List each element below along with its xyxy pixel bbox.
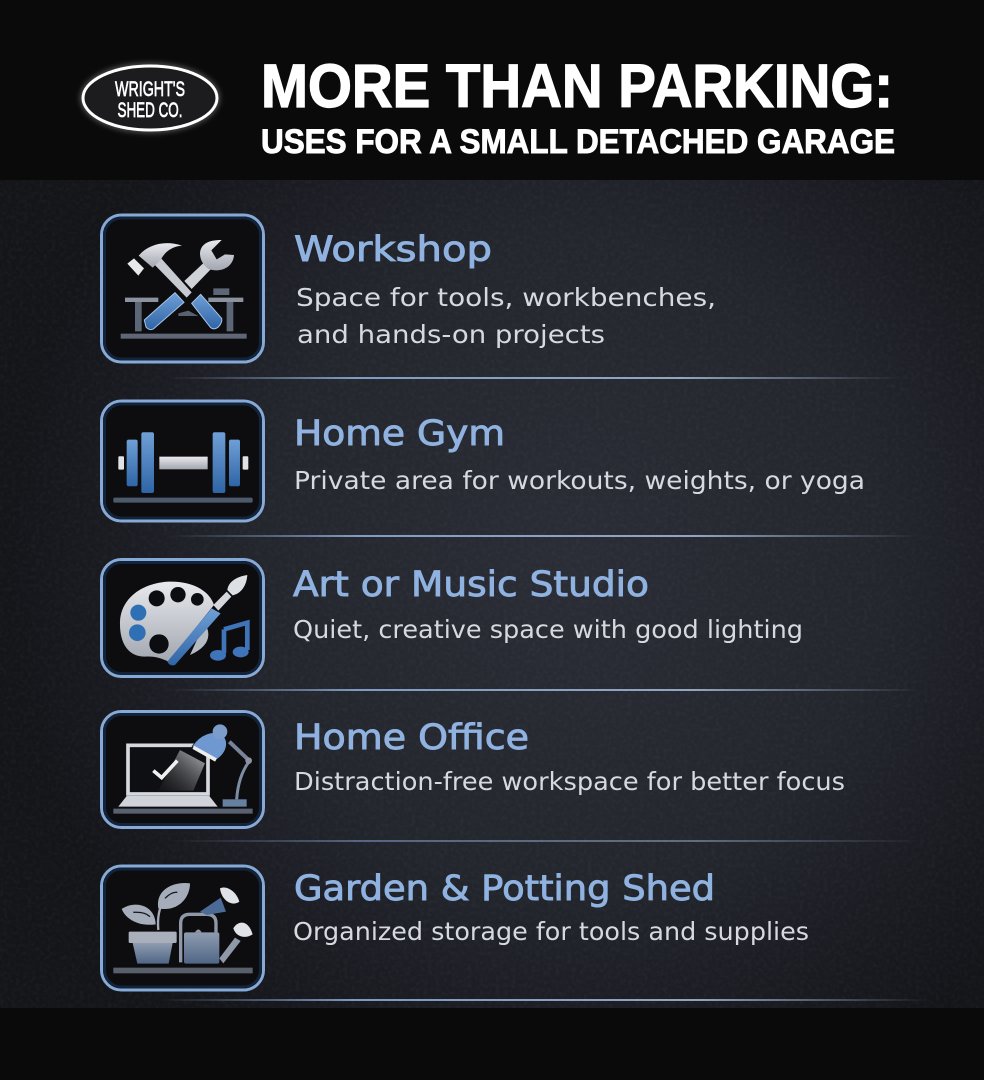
description: Space for tools, workbenches,	[296, 283, 716, 312]
description: Organized storage for tools and supplies	[293, 917, 809, 946]
description: Quiet, creative space with good lighting	[293, 615, 803, 644]
heading: Art or Music Studio	[293, 565, 649, 605]
logo: Wright's Shed Co.	[83, 66, 217, 130]
panel: home gym	[102, 401, 865, 521]
description: Private area for workouts, weights, or yoga	[294, 466, 865, 495]
icon: potted plant and watering can	[102, 866, 264, 990]
heading: Home Office	[294, 718, 529, 758]
heading: Home Gym	[294, 414, 505, 454]
panel: workshop: and hands-on projects	[297, 320, 605, 349]
logo: Wright's Shed Co.: WRIGHT'S	[115, 78, 185, 101]
icon: palette and music note	[102, 560, 264, 676]
logo: Wright's Shed Co.: SHED CO.	[118, 99, 182, 122]
panel: workshop	[102, 215, 716, 362]
title	[261, 53, 895, 161]
icon: dumbbell	[102, 401, 264, 521]
icon: hammer and wrench	[102, 215, 264, 362]
panel: home office	[102, 712, 845, 828]
heading: Garden & Potting Shed	[294, 869, 715, 909]
panel: garden and potting shed	[102, 866, 809, 990]
title: USES FOR A SMALL DETACHED GARAGE	[261, 123, 895, 161]
heading: Workshop	[294, 230, 492, 270]
panel: art or music studio	[102, 560, 803, 676]
description: Distraction-free workspace for better focus	[294, 767, 845, 796]
title: MORE THAN PARKING:	[261, 53, 893, 121]
icon: laptop and desk lamp	[102, 712, 264, 828]
